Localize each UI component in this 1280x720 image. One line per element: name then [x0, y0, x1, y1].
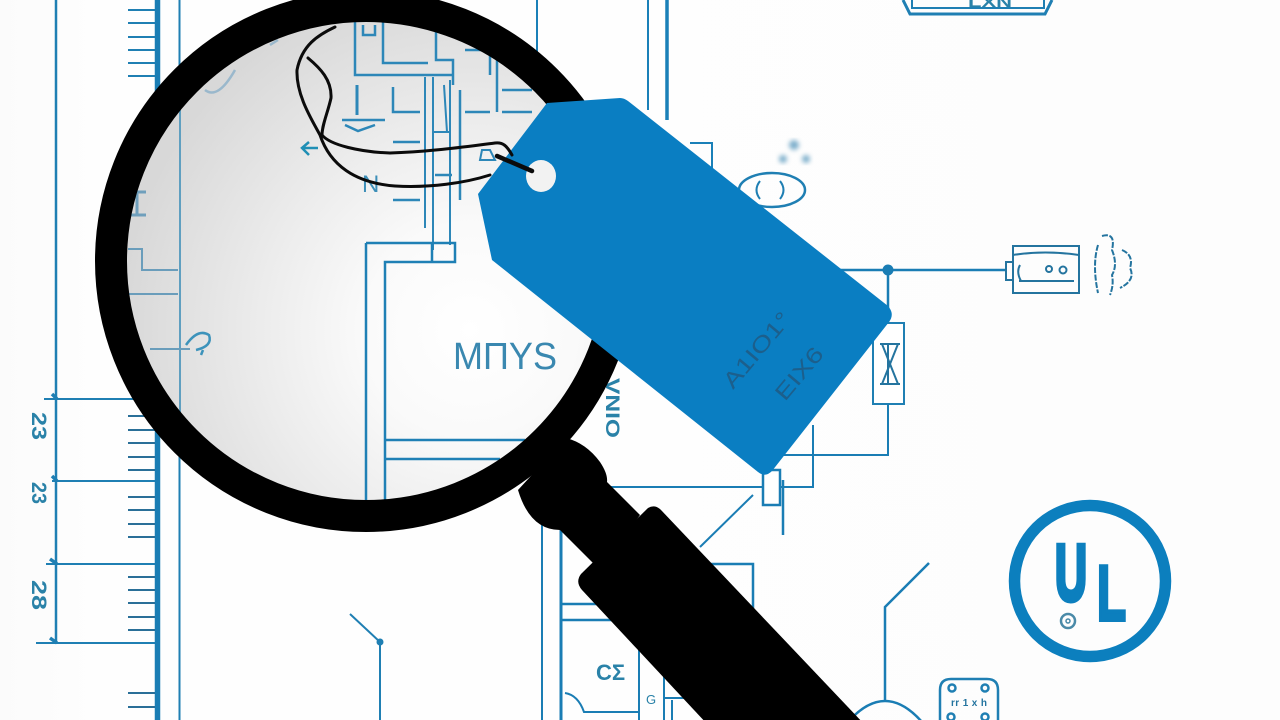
UL certification logo: [1014, 506, 1166, 656]
logo letters: [1055, 528, 1126, 637]
logo letters: U: [1055, 528, 1087, 617]
bottom centre schematic: G: [646, 692, 656, 707]
tag text: A1IO1°: [718, 307, 796, 393]
squiggle annotation: [1095, 235, 1132, 295]
rotated text beside lens: VNIO: [601, 378, 622, 438]
ruler labels: [27, 412, 50, 610]
bottom centre schematic: [542, 500, 695, 720]
dome and antenna: [848, 563, 929, 720]
tag eyelet: [526, 160, 556, 192]
blueprint seen through lens: [128, 20, 532, 500]
resistor box: [873, 323, 904, 404]
bottom centre schematic: CΣ: [596, 660, 625, 685]
top right octagonal label: [903, 0, 1052, 14]
tag text: [718, 307, 829, 405]
blue tag: [478, 98, 892, 475]
ellipse component: [739, 173, 805, 207]
lower right circuit lines: [610, 404, 888, 610]
black string through eyelet: [297, 27, 532, 186]
logo letters: L: [1097, 549, 1126, 637]
blueprint: top vertical lines: [537, 0, 712, 170]
ruler labels: 23: [27, 412, 50, 440]
blurred dots: [779, 140, 810, 163]
magnifying glass handle: [518, 438, 865, 720]
logo registered mark: [1061, 614, 1075, 628]
chip component: [940, 679, 998, 720]
small pin line at bottom: [350, 614, 384, 720]
tag text: EIX6: [770, 342, 829, 405]
circuit wire and node: [840, 264, 1005, 323]
lens text: MПYS: [453, 336, 557, 378]
blueprint seen through lens: N: [362, 171, 379, 198]
magnifying glass rim: [111, 6, 621, 516]
chip component: rr 1 x h: [951, 698, 987, 709]
ruler labels: 23: [27, 482, 50, 504]
blueprint: left ruler: [36, 0, 180, 720]
lens glass: [124, 19, 608, 503]
ruler labels: 28: [27, 580, 50, 610]
component box at end of wire: [1006, 246, 1079, 293]
